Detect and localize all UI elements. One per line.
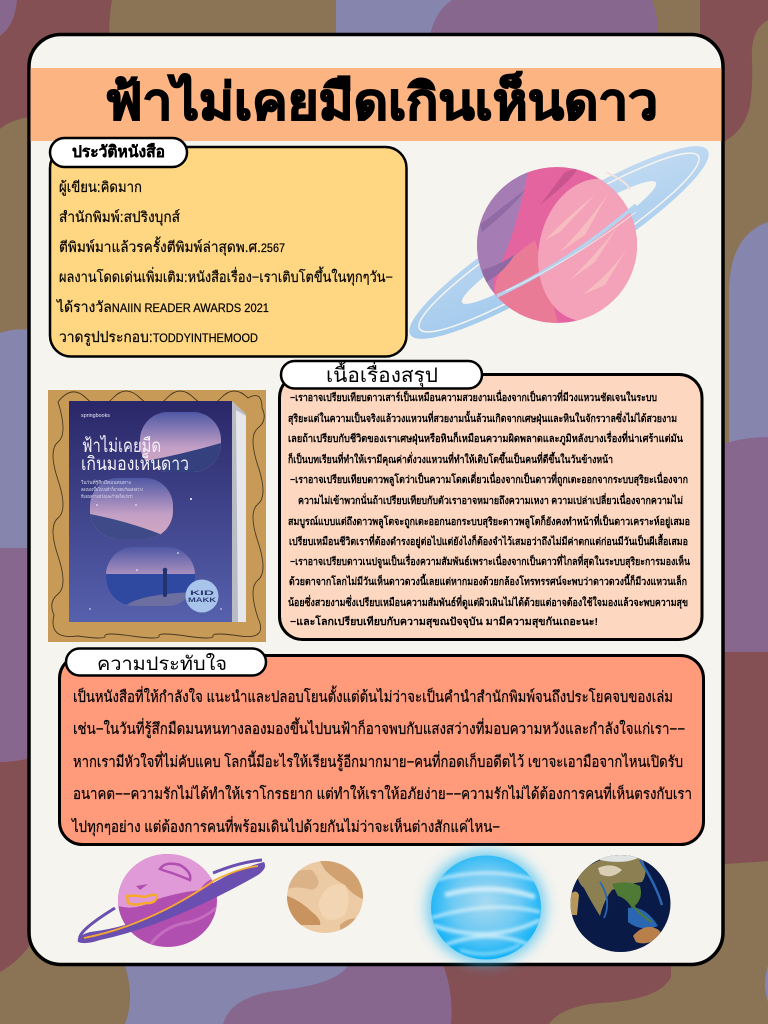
panel: book history	[50, 138, 406, 356]
book cover image: MAKK	[188, 598, 217, 604]
text: story summary: −และโลกเปรียบเทียบกับความสุขณปัจจุบัน มามีความสุขกันเถอะนะ!	[290, 615, 598, 629]
text: book details	[56, 179, 393, 346]
title banner	[30, 68, 722, 141]
panel: story summary	[280, 361, 702, 640]
text: impressions: เป็นหนังสือที่ให้กำลังใจ แนะนำและปลอบโยนตั้งแต่ต้นไม่ว่าจะเป็นคำนำสำนักพิมพ์จนถึงประโยคจบของเล่ม	[73, 685, 673, 706]
text: story summary: น้อยซึ่งสวยงามซึ่งเปรียบเหมือนความสัมพันธ์ที่ดูแต่ผิวเผินไม่ได้ด้วยแต่อาจต้องใช้ใจมองแล้วจะพบความสุข	[288, 594, 688, 610]
icon: tan planet	[287, 861, 363, 933]
heading pill: story summary: เนื้อเรื่องสรุป	[326, 361, 438, 388]
text: story summary: ก็เป็นบทเรียนที่ทำให้เรามีคุณค่าดั่งวงแหวนที่ทำให้เติบโตขึ้นเป็นคนที่ดีขึ้นในวันข้างหน้า	[288, 451, 613, 467]
book cover image: KID	[190, 591, 216, 597]
icon: earth	[570, 854, 670, 952]
text: book details: ได้รางวัลNAIIN READER AWARDS 2021	[56, 298, 269, 316]
text: story summary: ความไม่เข้าพวกนั่นถ้าเปรียบเทียบกับตัวเราอาจหมายถึงความเหงา ความเปล่าเปลี่ยวเนื่องจากความไม่	[298, 492, 683, 507]
title: ฟ้าไม่เคยมืดเกินเห็นดาว	[105, 71, 658, 130]
heading pill: book history	[50, 138, 187, 167]
text: story summary: ด้วยตาจากโลกไม่มีวันเห็นดาวดวงนี้เลยแต่หากมองด้วยกล้องโทรทรรศน์จะพบว่าดาวดวงนี้ก็มีวงแหวนเล็ก	[289, 573, 687, 588]
book cover image: ในวันที่รู้สึกมืดมนหนทาง	[81, 479, 131, 486]
text: story summary: เปรียบเหมือนชีวิตเราที่ต้องดำรงอยู่ต่อไปแต่ยังไงก็ต้องจำไว้เสมอว่าถึงไม่มีค่าตกแต่ก่อนมีวันเป็นผีเสื้อเสมอ	[289, 533, 688, 549]
text: impressions	[70, 685, 692, 837]
text: book details: สำนักพิมพ์:สปริงบุกส์	[59, 209, 180, 226]
text: story summary: −เราอาจเปรียบเทียบดาวพลูโตว่าเป็นความโดดเดี่ยวเนื่องจากเป็นดาวที่ถูกเตะออกจากระบบสุริยะเนื่องจาก	[290, 471, 688, 487]
book cover image	[48, 390, 266, 642]
text: book details: ตีพิมพ์มาแล้วรครั้งตีพิมพ์ล่าสุดพ.ศ.2567	[59, 236, 285, 256]
heading pill: impressions: ความประทับใจ	[97, 653, 227, 675]
text: story summary: สุริยะแต่ในความเป็นจริงแล้ววงแหวนที่สวยงามนั้นล้วนเกิดจากเศษฝุ่นและหินในจักรวาลซึ่งไม่ได้สวยงาม	[288, 410, 677, 426]
illustration: pink ringed planet	[409, 146, 709, 339]
text: book details: ผู้เขียน:คิดมาก	[59, 179, 142, 196]
text: impressions: ไปทุกๆอย่าง แต่ต้องการคนที่พร้อมเดินไปด้วยกันไม่ว่าจะเห็นต่างสักแค่ไหน−	[70, 816, 500, 837]
heading pill: book history: ประวัติหนังสือ	[72, 143, 165, 161]
text: story summary: −เราอาจเปรียบเทียบดาวเสาร์เป็นเหมือนความสวยงามเนื่องจากเป็นดาวที่มีวงแหวนชัดเจนในระบบ	[290, 389, 657, 404]
text: story summary: สมบูรณ์แบบแต่ถึงดาวพลูโตจะถูกเตะออกนอกระบบสุริยะดาวพลูโตก็ยังคงทำหน้าที่เป็นดาวเคราะห์อยู่เสมอ	[288, 513, 690, 529]
book cover image: เกินมองเห็นดาว	[81, 451, 189, 475]
book cover image: ที่มอบความหวังและกำลังใจแก่เรา	[81, 493, 133, 499]
book cover image: ลองมองขึ้นไปบนฟ้าก็อาจพบกับแสงสว่าง	[81, 485, 143, 492]
icon: blue glowing planet	[427, 852, 545, 964]
text: story summary: −เราอาจเปรียบดาวเนปจูนเป็นเรื่องความสัมพันธ์เพราะเนื่องจากเป็นดาวที่ไกลที่สุดในระบบสุริยะการมองเห็น	[290, 553, 691, 569]
text: story summary	[288, 389, 691, 629]
heading pill: impressions	[66, 648, 266, 676]
text: impressions: เช่น−ในวันที่รู้สึกมืดมนหนทางลองมองขึ้นไปบนฟ้าก็อาจพบกับแสงสว่างที่มอบความหวังและกำลังใจแก่เรา−−	[73, 717, 685, 739]
text: book details: ผลงานโดดเด่นเพิ่มเติม:หนังสือเรื่อง−เราเติบโตขึ้นในทุกๆวัน−	[59, 266, 393, 286]
panel: impressions	[60, 648, 704, 844]
text: story summary: เลยถ้าเปรียบกับชีวิตของเราเศษฝุ่นหรือหินก็เหมือนความผิดพลาดและภูมิหลังบางเรื่องที่น่าเศร้าแต่มัน	[288, 430, 684, 446]
book cover image: ฟ้าไม่เคยมืด	[82, 435, 161, 457]
icon: purple ringed planet	[78, 850, 265, 947]
book cover image: springbooks	[81, 413, 111, 419]
heading pill: story summary	[281, 361, 482, 388]
text: book details: วาดรูปประกอบ:TODDYINTHEMOOD	[59, 330, 258, 346]
